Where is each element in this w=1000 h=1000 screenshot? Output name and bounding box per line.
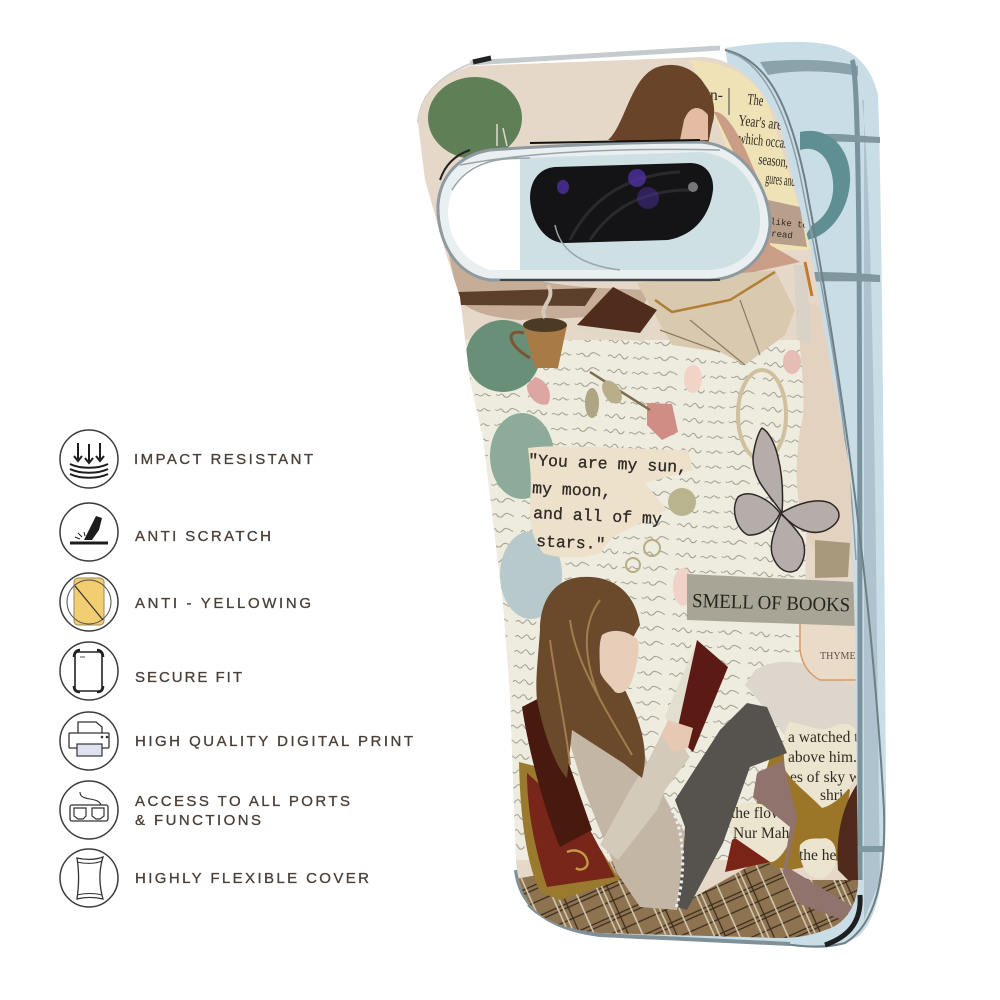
tan page with printed text: gures and — [765, 170, 796, 190]
lens arcs — [570, 172, 690, 240]
feature: impact resistant — [60, 430, 313, 488]
feature: impact resistant: IMPACT RESISTANT — [134, 451, 313, 468]
feature: secure fit: SECURE FIT — [135, 669, 242, 686]
heart paper with book text, right: shri — [820, 787, 844, 804]
hem stitching — [672, 810, 683, 908]
open red book — [665, 640, 728, 752]
gold mustard blanket — [756, 754, 850, 870]
feature: highly flexible cover: HIGHLY FLEXIBLE COVER — [135, 870, 369, 887]
phone body behind the case — [620, 42, 886, 948]
gold cushion — [519, 762, 620, 900]
camera cut-out of clear case — [438, 140, 770, 280]
feature: high quality digital print — [60, 712, 413, 770]
green circle top — [428, 77, 522, 159]
red cushion — [527, 773, 615, 887]
beige paper background — [410, 50, 870, 950]
feature: high quality digital print: HIGH QUALITY DIGITAL PRINT — [135, 733, 413, 750]
heart paper with book text, right: above him. — [788, 749, 857, 766]
brown blanket strip — [448, 250, 650, 320]
sock leg — [753, 760, 853, 920]
face — [600, 631, 638, 693]
feature: anti scratch — [60, 503, 271, 561]
flash spot — [688, 182, 698, 192]
feature: access to all ports — [60, 781, 350, 839]
heart paper with book text, middle — [730, 802, 790, 862]
feature: highly flexible cover — [60, 849, 369, 907]
handwritten letter paper — [450, 340, 810, 860]
feature: secure fit — [60, 642, 242, 700]
red book under knee — [725, 838, 770, 872]
quote paper with typewriter text: stars." — [536, 532, 606, 554]
sweater body — [570, 730, 685, 910]
icon: arrows on layers — [60, 430, 118, 488]
feature: anti yellowing: ANTI - YELLOWING — [135, 595, 311, 612]
label two lines: ACCESS TO ALL PORTS — [135, 793, 350, 810]
sweater sleeve — [600, 723, 690, 860]
label two lines — [135, 793, 350, 829]
pale blue circle — [500, 531, 562, 619]
sage circle — [490, 413, 554, 499]
heart paper small: the he — [799, 847, 837, 864]
heart paper with book text, right: es of sky w — [790, 769, 861, 786]
dark maroon scarf cushion — [522, 695, 592, 847]
thyme card — [800, 622, 858, 680]
lavender sprig — [815, 540, 850, 578]
woman top with hair — [608, 65, 800, 275]
coffee cup — [511, 285, 567, 368]
heart paper small — [799, 838, 837, 878]
quote paper with typewriter text: and all of my — [533, 504, 662, 529]
tag: like to read — [768, 200, 808, 247]
open book pages — [637, 270, 795, 365]
panel: printed collage artwork — [410, 50, 873, 950]
hand — [662, 720, 693, 752]
quote paper with typewriter text — [528, 446, 693, 558]
dried flower pin on green circle — [497, 124, 507, 146]
tag: like to read: like to — [770, 217, 808, 231]
tan page with printed text — [690, 60, 812, 250]
quote paper with typewriter text: my moon, — [532, 479, 612, 502]
dried roses and petals — [527, 350, 801, 606]
tan page with printed text: season, — [758, 151, 789, 171]
label: smell of books — [687, 574, 855, 626]
lens bump outer pill — [438, 142, 770, 280]
icon: twin ports — [60, 781, 118, 839]
closed brown book — [573, 287, 657, 342]
heart paper with book text, right — [784, 722, 857, 808]
label two lines: & FUNCTIONS — [135, 812, 261, 829]
camera black pill — [530, 163, 713, 243]
inner phone glass area — [520, 152, 760, 270]
tag: like to read: read — [771, 229, 793, 241]
heart paper with book text, middle: Nur Mah — [733, 825, 790, 842]
coffee ring stain — [738, 370, 786, 460]
dark maroon shape right — [838, 784, 858, 890]
purple lens glints — [557, 169, 659, 209]
pillow behind card — [745, 662, 857, 742]
highlight lines — [452, 149, 720, 270]
hair long — [536, 577, 645, 778]
right beige torn strip — [796, 303, 853, 560]
icon: flexed cover — [60, 849, 118, 907]
clear case outer edge — [418, 48, 884, 947]
tan page with printed text: n- — [710, 87, 723, 104]
label: smell of books: SMELL OF BOOKS — [692, 590, 850, 616]
heart paper with book text, middle: the flowers — [731, 805, 800, 822]
feature list — [60, 430, 413, 907]
icon: printer — [60, 712, 118, 770]
candle jar — [794, 262, 812, 345]
heart paper with book text, right: a watched the — [788, 729, 873, 746]
tan page with printed text: which occas — [738, 130, 789, 152]
gold embroidery — [567, 850, 588, 870]
feature: anti yellowing — [60, 573, 311, 631]
icon: yellow case crossed — [60, 573, 118, 631]
tan page with printed text: The — [747, 91, 764, 110]
quote paper with typewriter text: "You are my sun, — [528, 451, 687, 477]
green circle middle — [466, 320, 540, 392]
hair streaks — [550, 600, 632, 765]
icon: blade on surface — [60, 503, 118, 561]
plaid floor blanket — [518, 861, 858, 938]
thyme card: THYME — [820, 651, 856, 662]
inner white left area — [448, 160, 520, 270]
feature: anti scratch: ANTI SCRATCH — [135, 528, 271, 545]
butterfly — [735, 428, 839, 572]
jeans — [675, 703, 787, 910]
icon: phone with bumpers — [60, 642, 118, 700]
tan page with printed text: Year's are — [738, 112, 783, 134]
